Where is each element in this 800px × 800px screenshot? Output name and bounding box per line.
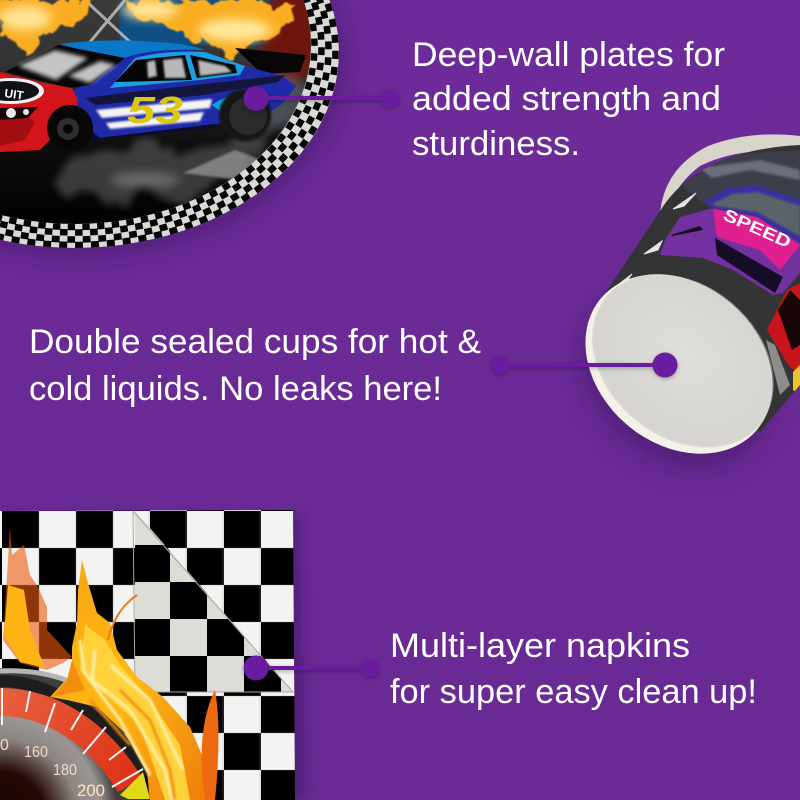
caption: napkins: Multi-layer napkins xyxy=(390,627,690,665)
cup speed label: SPEED xyxy=(720,205,794,252)
caption: cups xyxy=(29,323,481,408)
caption: plates: Deep-wall plates for xyxy=(412,36,725,74)
caption: napkins: for super easy clean up! xyxy=(390,673,757,711)
callout: cups xyxy=(491,352,678,378)
caption: cups: cold liquids. No leaks here! xyxy=(29,370,442,408)
caption: plates: added strength and xyxy=(412,80,721,118)
flames xyxy=(3,527,218,800)
caption: plates: sturdiness. xyxy=(412,125,580,163)
cup body xyxy=(600,140,800,440)
checkered border xyxy=(0,0,339,248)
napkin fold xyxy=(133,511,295,692)
gauge numbers: 160 xyxy=(24,744,48,761)
badge text: UIT xyxy=(4,86,25,103)
gauge numbers: 180 xyxy=(53,762,77,779)
car xyxy=(0,40,306,152)
caption: napkins xyxy=(390,627,757,711)
caption: cups: Double sealed cups for hot & xyxy=(29,323,481,361)
gauge numbers: 0 xyxy=(0,737,9,754)
cup base xyxy=(549,236,800,491)
cup rim xyxy=(660,134,800,214)
panel: napkin xyxy=(0,510,306,800)
callout: napkins xyxy=(244,656,379,680)
gauge numbers: 200 xyxy=(77,781,105,800)
gauge numbers xyxy=(0,739,104,796)
car number: 53 xyxy=(127,90,183,132)
caption: plates xyxy=(412,36,725,163)
napkin checker xyxy=(0,510,296,800)
panel: cup xyxy=(576,134,800,474)
speedometer xyxy=(0,668,150,800)
plate image xyxy=(0,0,320,231)
watermark: ©BirthdayGalore.com xyxy=(68,223,130,231)
callout: plates xyxy=(244,86,399,111)
panel: plate xyxy=(0,0,346,258)
